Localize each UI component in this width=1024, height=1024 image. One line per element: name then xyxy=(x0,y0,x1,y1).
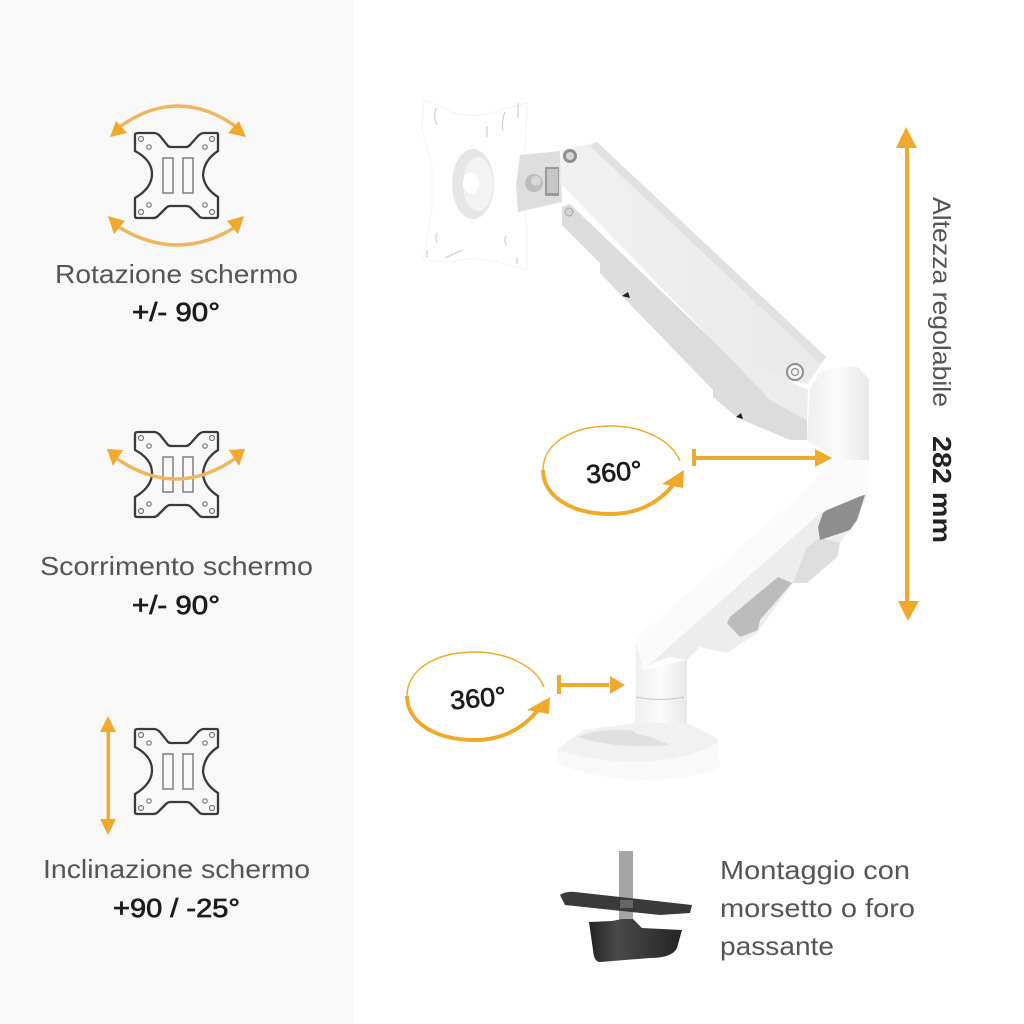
value: scorrimento: +/- 90° xyxy=(132,590,220,620)
head joint xyxy=(516,151,562,212)
upper 360 label: 360° xyxy=(585,455,643,489)
mounting text: Montaggio con xyxy=(720,855,910,885)
bracket notches xyxy=(622,292,743,419)
plate holes xyxy=(427,103,518,264)
label: scorrimento: Scorrimento schermo xyxy=(40,551,313,581)
icon: tilt arrow xyxy=(100,716,116,835)
value: rotazione: +/- 90° xyxy=(132,297,220,327)
lower rotation ring xyxy=(407,652,544,740)
value: inclinazione: +90 / -25° xyxy=(113,893,240,923)
plate hub xyxy=(452,149,494,219)
icon: mounting clamp xyxy=(560,851,692,962)
upper rotation arrowhead xyxy=(662,470,684,488)
grey spring cut-out xyxy=(727,577,792,637)
height label: Altezza regolabile xyxy=(927,197,955,407)
column seam xyxy=(636,697,684,700)
panel: scorrimento schermo xyxy=(40,432,313,620)
height value: 282 mm xyxy=(927,436,957,543)
mounting text xyxy=(720,855,915,961)
link bolt xyxy=(565,208,573,216)
icon: mounting plate xyxy=(135,133,218,218)
monitor arm illustration xyxy=(422,100,869,780)
lower rotation arrowhead xyxy=(527,697,550,714)
panel: inclinazione schermo xyxy=(43,716,310,923)
lower 360 rotation callout xyxy=(407,652,625,740)
icon: swivel arrow xyxy=(107,449,245,479)
upper 360 rotation callout xyxy=(543,426,832,514)
height arrow xyxy=(896,127,919,621)
VESA plate xyxy=(422,100,527,270)
icon: mounting plate xyxy=(135,729,218,814)
label: inclinazione: Inclinazione schermo xyxy=(43,854,310,884)
lower arm panel xyxy=(637,460,868,670)
lower column xyxy=(635,640,687,735)
icon: rotation arrows xyxy=(108,106,246,245)
spring housing xyxy=(793,538,840,583)
dark spring cut-out xyxy=(818,495,865,540)
upper rotation ring xyxy=(543,426,680,514)
central column xyxy=(807,367,869,462)
elbow fin xyxy=(727,355,808,420)
icon: mounting plate xyxy=(135,432,218,517)
base clamp xyxy=(557,722,720,780)
lower pointer arrow xyxy=(557,675,625,694)
label: rotazione: Rotazione schermo xyxy=(55,259,298,289)
top bolt xyxy=(563,149,577,163)
left panel background xyxy=(0,0,353,1024)
upper pointer arrow xyxy=(692,449,832,467)
lower arm link xyxy=(562,204,807,440)
panel: rotazione schermo xyxy=(55,106,298,327)
lower arm underside xyxy=(643,493,868,670)
mounting text: morsetto o foro xyxy=(720,893,915,923)
elbow bolt xyxy=(787,364,803,380)
upper arm cover xyxy=(560,142,826,384)
lower 360 label: 360° xyxy=(449,681,507,715)
mounting text: passante xyxy=(720,931,834,961)
